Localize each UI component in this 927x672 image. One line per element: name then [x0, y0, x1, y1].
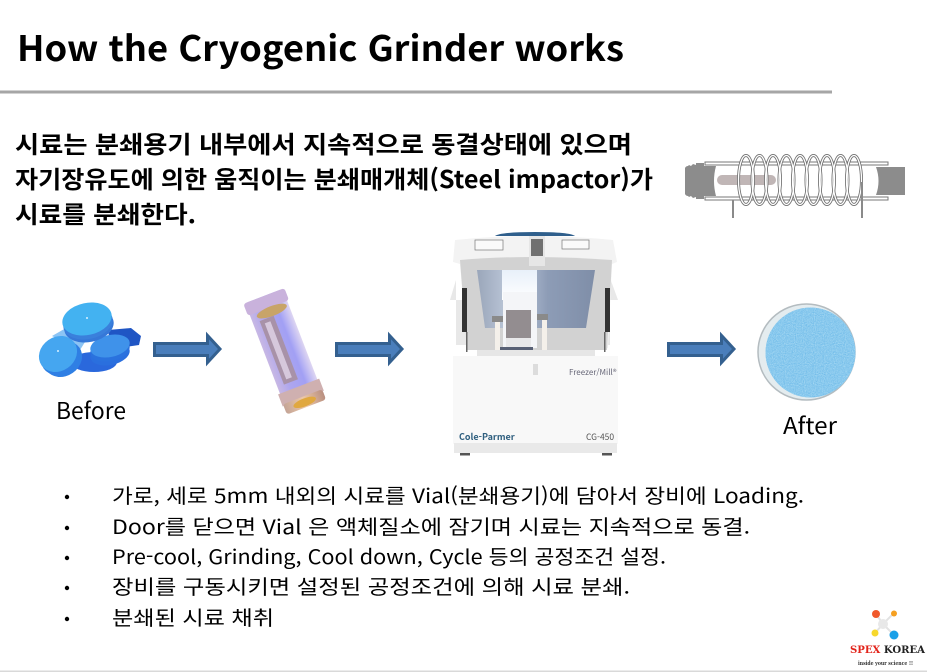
- title: How the Cryogenic Grinder works: [17, 21, 624, 72]
- icon: grinding vial: [243, 288, 327, 415]
- bullet 4: 장비를 구동시키면 설정된 공정조건에 의해 시료 분쇄.: [112, 571, 630, 600]
- intro text block: [15, 125, 653, 230]
- arrow 3: [668, 336, 734, 362]
- icon: Cole-Parmer CG-450 Freezer/Mill: Cole-Parmer: [459, 430, 515, 443]
- intro text block: 시료를 분쇄한다.: [15, 195, 196, 230]
- logo: SPEX KOREA: inside your science !!: [858, 661, 913, 667]
- icon: blue sample discs: [32, 298, 141, 384]
- arrow 2: [336, 336, 402, 362]
- icon: vial with magnetic coil diagram: [685, 156, 905, 218]
- bullet 2: Door를 닫으면 Vial 은 액체질소에 잠기며 시료는 지속적으로 동결.: [112, 511, 750, 540]
- intro text block: 시료는 분쇄용기 내부에서 지속적으로 동결상태에 있으며: [15, 125, 632, 160]
- bullet list: [65, 480, 804, 631]
- bullet 1: 가로, 세로 5mm 내외의 시료를 Vial(분쇄용기)에 담아서 장비에 Loading.: [112, 480, 804, 509]
- logo: SPEX KOREA: [850, 610, 925, 667]
- intro text block: 자기장유도에 의한 움직이는 분쇄매개체(Steel impactor)가: [15, 160, 653, 195]
- bullet 5: 분쇄된 시료 채취: [112, 602, 274, 631]
- icon: Cole-Parmer CG-450 Freezer/Mill: CG-450: [586, 431, 614, 443]
- label: Before: Before: [56, 392, 126, 426]
- icon: Cole-Parmer CG-450 Freezer/Mill: [450, 232, 618, 456]
- header rule: [0, 90, 832, 94]
- arrow 1: [154, 336, 220, 362]
- bottom rule: [0, 670, 927, 672]
- logo: SPEX KOREA: SPEX KOREA: [850, 645, 925, 656]
- icon: ground sample dish: [758, 304, 856, 400]
- bullet 3: Pre-cool, Grinding, Cool down, Cycle 등의 공정조건 설정.: [112, 541, 666, 570]
- bullet 5: [65, 602, 274, 631]
- label: After: After: [783, 407, 837, 441]
- icon: Cole-Parmer CG-450 Freezer/Mill: Freezer/Mill®: [569, 367, 617, 378]
